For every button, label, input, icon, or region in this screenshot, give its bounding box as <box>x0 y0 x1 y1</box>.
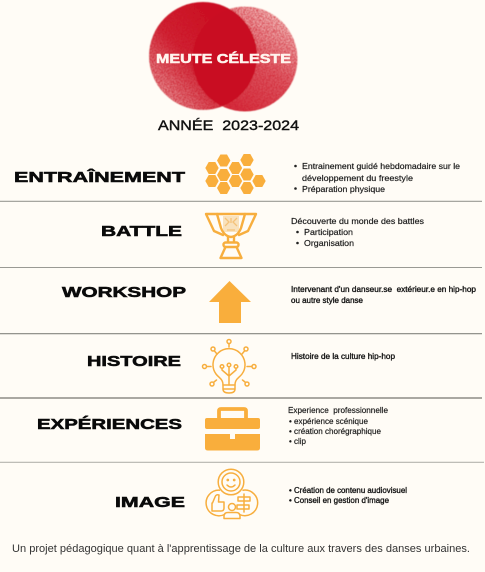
text: expériences details: • création chorégraphique <box>289 426 381 436</box>
text: image details: • Conseil en gestion d'image <box>289 495 389 505</box>
icon: honeycomb <box>205 154 266 194</box>
heading: battle: BATTLE <box>101 224 182 240</box>
footer text: Un projet pédagogique quant à l'apprentissage de la culture aux travers des danses urbaines. <box>12 543 470 555</box>
text: entraînement details: développement du freestyle <box>302 173 413 183</box>
text: expériences details: • expérience scénique <box>289 416 368 426</box>
text: battle details: Organisation <box>304 238 354 248</box>
logo: overlapping red circles with name: MEUTE CÉLESTE <box>156 51 291 66</box>
heading: workshop: WORKSHOP <box>62 285 186 301</box>
text: entraînement details: Entrainement guidé hebdomadaire sur le <box>302 161 460 171</box>
icon: trophy <box>206 214 256 258</box>
subtitle: year: ANNÉE 2023-2024 <box>158 117 299 133</box>
row: expériences <box>37 405 388 450</box>
icon: social circles <box>206 469 258 518</box>
text: workshop details: ou autre style danse <box>291 295 363 305</box>
text: expériences details: Experience professionnelle <box>288 405 388 415</box>
text: battle details: Participation <box>304 227 353 237</box>
text: histoire details: Histoire de la culture hip-hop <box>291 351 395 361</box>
icon: briefcase <box>205 409 260 450</box>
heading: histoire: HISTOIRE <box>87 354 181 370</box>
icon: light bulb <box>202 340 256 393</box>
text: battle details: Découverte du monde des battles <box>291 216 424 226</box>
heading: expériences: EXPÉRIENCES <box>37 416 182 433</box>
text: entraînement details: Préparation physique <box>302 184 385 194</box>
text: image details: • Création de contenu audiovisuel <box>289 485 407 495</box>
text: entraînement details <box>294 161 460 194</box>
row: battle <box>101 214 424 258</box>
row dividers <box>0 201 484 462</box>
text: workshop details <box>291 284 476 305</box>
text: expériences details <box>288 405 388 446</box>
text: image details <box>289 485 407 505</box>
row: histoire <box>87 340 395 393</box>
heading: entraînement: ENTRAÎNEMENT <box>14 168 185 186</box>
text: expériences details: • clip <box>289 436 306 446</box>
text: workshop details: Intervenant d'un danseur.se extérieur.e en hip-hop <box>291 284 476 294</box>
row: image <box>115 469 407 518</box>
icon: up arrow <box>209 281 251 323</box>
logo: overlapping red circles with name <box>148 2 298 112</box>
row: entraînement <box>14 154 460 194</box>
text: battle details <box>291 216 424 248</box>
heading: image: IMAGE <box>115 495 185 511</box>
row: workshop <box>62 281 476 323</box>
